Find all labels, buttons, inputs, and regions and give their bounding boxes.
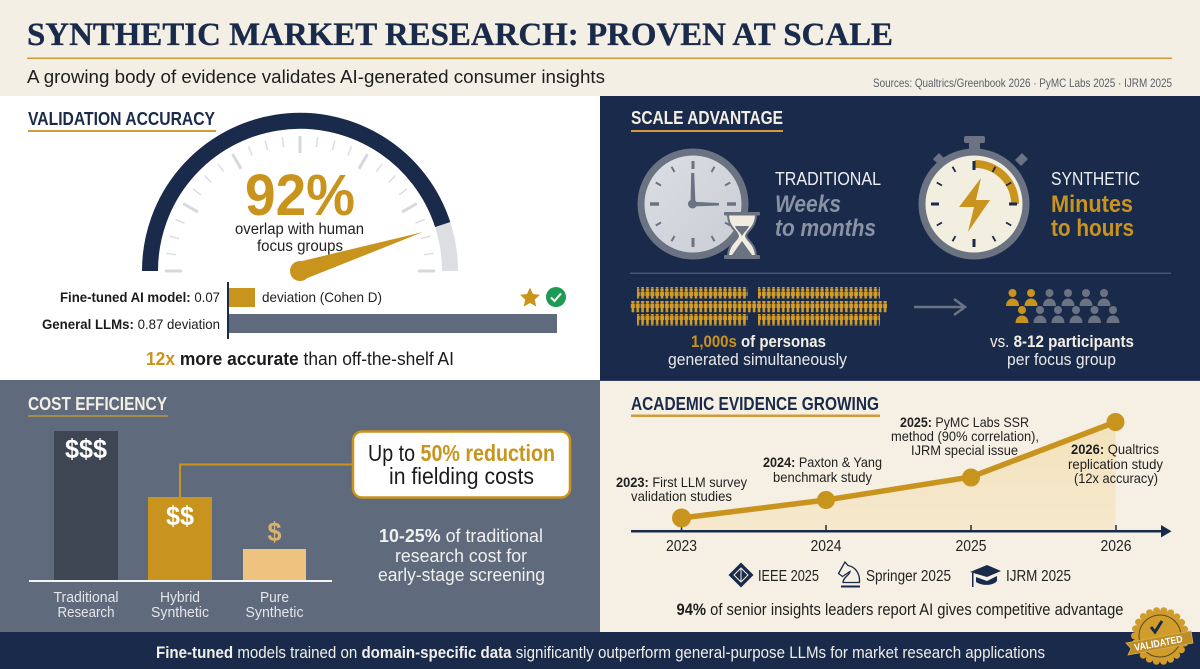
footer banner: Fine-tuned models trained on domain-specific data significantly outperform general-purpose LLMs for market research applications <box>156 643 1045 662</box>
label: IEEE: IEEE 2025 <box>758 568 819 585</box>
label: deviation: deviation (Cohen D) <box>262 289 382 305</box>
icon: graduation cap <box>970 565 1001 587</box>
timeline chart <box>631 413 1172 555</box>
icon: check <box>546 287 566 307</box>
label: general LLMs: General LLMs: 0.87 deviation <box>42 316 220 332</box>
traditional label: TRADITIONAL <box>775 169 881 189</box>
validated badge: VALIDATED <box>1134 634 1184 654</box>
persona crowd <box>630 287 887 326</box>
bar: hybrid: $$ <box>166 501 194 531</box>
subtitle: A growing body of evidence validates AI-generated consumer insights <box>27 66 605 87</box>
annotation: 2026: 2026: Qualtrics <box>1071 441 1159 457</box>
label: Springer: Springer 2025 <box>866 568 951 585</box>
synthetic duration: to hours <box>1051 215 1134 242</box>
gauge value: 92% <box>245 163 355 228</box>
traditional duration: Weeks <box>775 191 841 218</box>
gauge caption: overlap with human <box>235 221 364 238</box>
bar labels <box>54 590 304 621</box>
bar: pure <box>243 517 306 580</box>
bar: traditional <box>54 431 118 580</box>
synthetic label: SYNTHETIC <box>1051 169 1140 189</box>
bar chart: cost <box>29 431 332 621</box>
personas caption: 1,000s of personas <box>691 333 826 351</box>
bar labels: Research <box>58 605 114 621</box>
heading: validation accuracy: VALIDATION ACCURACY <box>28 109 215 129</box>
annotation: 2026: replication study <box>1068 456 1163 472</box>
icon: star <box>520 288 540 306</box>
validated badge <box>1126 610 1193 662</box>
panel: validation accuracy <box>0 96 600 380</box>
participants caption line 2: per focus group <box>1007 351 1116 369</box>
callout: fielding costs <box>353 432 570 498</box>
bar: traditional: $$$ <box>65 434 107 464</box>
personas caption line 2: generated simultaneously <box>668 351 848 369</box>
heading: scale advantage: SCALE ADVANTAGE <box>631 108 783 128</box>
icon: stopwatch <box>922 136 1028 256</box>
bar labels: Traditional <box>54 590 118 606</box>
insight statement: 94% of senior insights leaders report AI gives competitive advantage <box>676 601 1124 619</box>
annotation: 2024: benchmark study <box>773 469 872 485</box>
annotation: 2026: (12x accuracy) <box>1074 470 1158 486</box>
cost note: 10-25% of traditional <box>379 525 543 546</box>
heading: cost efficiency: COST EFFICIENCY <box>28 394 167 414</box>
bar: pure: $ <box>268 517 282 547</box>
icon: IEEE <box>728 562 754 588</box>
cost note: early-stage screening <box>378 564 545 585</box>
panel: scale advantage <box>600 96 1200 380</box>
synthetic duration: Minutes <box>1051 191 1133 218</box>
connector <box>180 464 352 497</box>
bar labels: Hybrid <box>160 590 200 606</box>
accuracy callout: 12x more accurate than off-the-shelf AI <box>146 348 454 369</box>
deviation bar chart <box>42 282 566 339</box>
annotation: 2023: validation studies <box>631 488 732 504</box>
title: SYNTHETIC MARKET RESEARCH: PROVEN AT SCALE <box>27 17 893 53</box>
cost note <box>378 525 545 585</box>
gauge <box>150 121 450 281</box>
label: IJRM: IJRM 2025 <box>1006 568 1071 585</box>
annotation: 2025: 2025: PyMC Labs SSR <box>900 414 1029 430</box>
annotation: 2025: method (90% correlation), <box>891 428 1039 444</box>
callout: fielding costs: Up to 50% reduction <box>368 440 555 466</box>
year labels <box>666 538 1132 555</box>
traditional duration: to months <box>775 215 876 242</box>
bar labels: Pure <box>260 590 289 606</box>
annotation: 2023: 2023: First LLM survey <box>616 474 747 490</box>
annotation: 2024 <box>763 454 882 485</box>
annotation: 2024: 2024: Paxton & Yang <box>763 454 882 470</box>
icon: Springer knight <box>838 562 860 586</box>
bar labels: Synthetic <box>246 605 304 621</box>
gauge needle <box>290 232 423 281</box>
arrow <box>914 299 965 315</box>
gauge caption line 2: focus groups <box>257 238 343 255</box>
heading: academic evidence: ACADEMIC EVIDENCE GROWING <box>631 394 879 414</box>
bar: hybrid <box>148 497 212 580</box>
year labels: 2025 <box>956 538 986 555</box>
annotation: 2025 <box>891 414 1039 458</box>
synthetic duration <box>1051 191 1134 242</box>
panel: cost efficiency <box>0 380 600 632</box>
panel: academic evidence <box>600 380 1200 632</box>
icon: hourglass <box>724 212 760 259</box>
year labels: 2024 <box>810 538 842 555</box>
label: fine-tuned: Fine-tuned AI model: 0.07 <box>60 289 220 305</box>
annotation: 2023 <box>616 474 747 504</box>
header panel <box>0 0 1200 96</box>
callout: fielding costs: in fielding costs <box>389 463 534 489</box>
icon: wall clock <box>641 152 760 259</box>
cost note: research cost for <box>395 545 527 566</box>
annotation: 2026 <box>1068 441 1163 486</box>
year labels: 2026 <box>1100 538 1132 555</box>
focus group people <box>1006 289 1120 323</box>
traditional duration <box>775 191 876 242</box>
participants caption: vs. 8-12 participants <box>990 333 1134 351</box>
footer banner <box>0 632 1200 669</box>
annotation: 2025: IJRM special issue <box>911 442 1018 458</box>
bar labels: Synthetic <box>151 605 209 621</box>
year labels: 2023 <box>666 538 697 555</box>
